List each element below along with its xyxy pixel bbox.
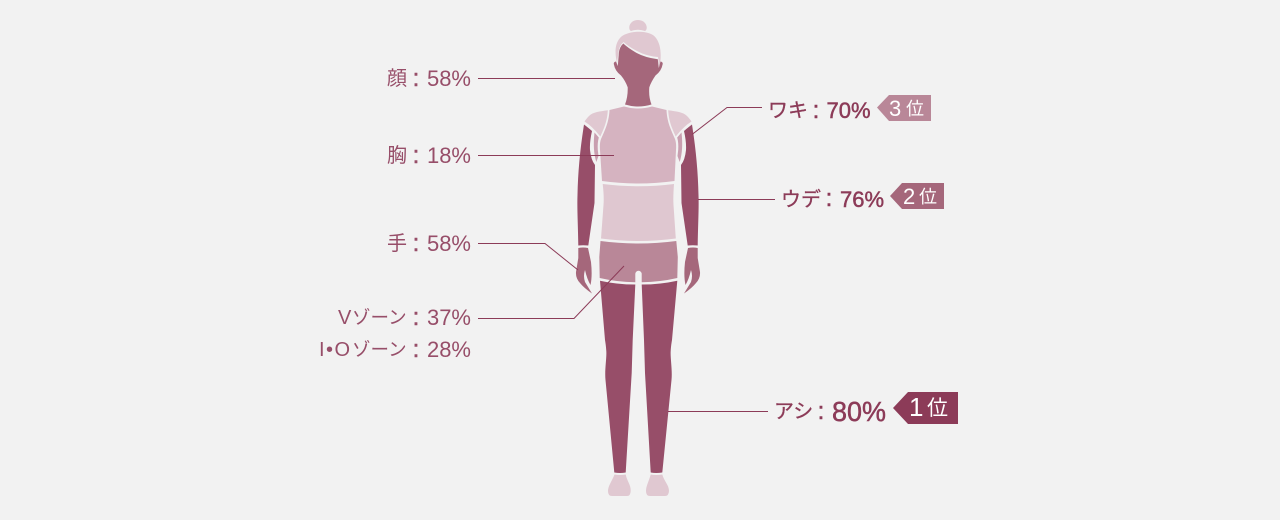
underarms xyxy=(594,132,682,162)
label: chest: 胸 xyxy=(387,144,407,167)
label: leg: アシ xyxy=(774,401,813,423)
badge: rank 2: 位 xyxy=(919,187,937,207)
head and neck xyxy=(614,44,663,106)
label: arm xyxy=(781,185,884,212)
hips xyxy=(599,241,678,282)
label: underarm xyxy=(768,97,871,124)
label: underarm: 70% xyxy=(826,98,871,123)
label: face: 58% xyxy=(427,66,471,91)
badge: rank 1: 位 xyxy=(927,397,948,420)
label: I-O zone: I•O xyxy=(319,339,350,361)
label: I-O zone: ゾーン xyxy=(352,339,407,360)
label: I-O zone: : xyxy=(413,336,419,363)
label: hand: : xyxy=(413,230,419,257)
label: leg xyxy=(774,396,886,427)
label: hand: 手 xyxy=(387,232,407,255)
badge: rank 1: 1 xyxy=(909,392,923,422)
label: chest: 18% xyxy=(427,143,471,168)
label: underarm: ワキ xyxy=(768,100,808,122)
label: V zone: ゾーン xyxy=(352,307,407,328)
label: hand xyxy=(387,230,471,257)
feet xyxy=(608,474,631,496)
label: hand: 58% xyxy=(427,231,471,256)
label: arm: : xyxy=(826,185,832,212)
label: face xyxy=(387,65,471,92)
label: V zone: 37% xyxy=(427,305,471,330)
hands xyxy=(576,248,592,294)
waist xyxy=(601,184,676,241)
label: chest xyxy=(387,142,471,169)
badge: rank 3: 3 xyxy=(889,96,901,121)
chest xyxy=(600,106,676,184)
legs xyxy=(600,281,635,473)
label: underarm: : xyxy=(813,97,819,124)
human figure xyxy=(576,20,700,496)
leader lines xyxy=(478,78,775,412)
label: V zone: V xyxy=(338,307,352,329)
label: I-O zone xyxy=(319,336,471,363)
label: face: 顔 xyxy=(387,67,407,90)
hair xyxy=(616,32,661,68)
badge: rank 2: 2 xyxy=(903,184,915,209)
label: leg: : xyxy=(818,398,824,425)
label: leg: 80% xyxy=(832,396,886,427)
label: face: : xyxy=(413,65,419,92)
label: chest: : xyxy=(413,142,419,169)
label: V zone: : xyxy=(413,304,419,331)
label: arm: 76% xyxy=(840,187,884,212)
badge: rank 2 xyxy=(890,183,944,209)
badge: rank 3 xyxy=(877,95,931,121)
arms xyxy=(577,124,595,246)
badge: rank 3: 位 xyxy=(906,99,924,119)
label: I-O zone: 28% xyxy=(427,337,471,362)
shoulders xyxy=(584,110,608,136)
label: arm: ウデ xyxy=(781,188,821,211)
label: V zone xyxy=(338,304,471,331)
hair bun xyxy=(629,20,647,31)
badge: rank 1 xyxy=(893,392,958,424)
